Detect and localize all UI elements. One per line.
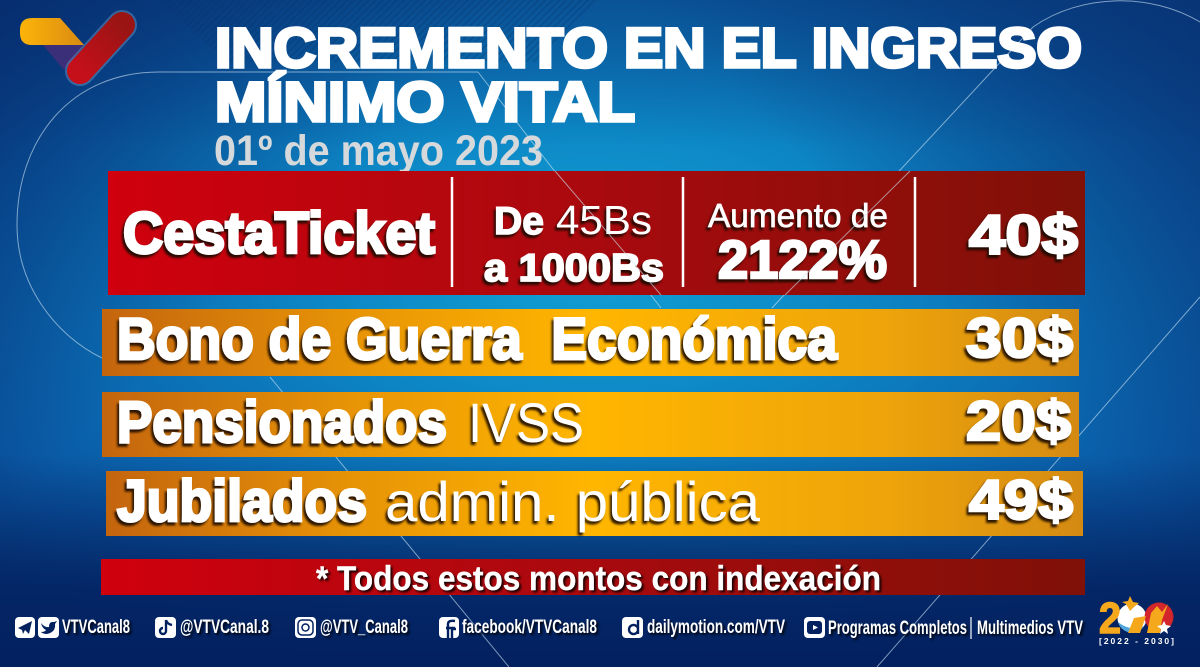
handle: dailymotion: dailymotion.com/VTV — [647, 617, 785, 638]
range from 45Bs to 1000Bs: a 1000Bs — [484, 247, 664, 290]
handle: VTVCanal8: VTVCanal8 — [62, 617, 130, 638]
logo: VTV check mark — [20, 18, 122, 71]
increase 2122% — [708, 197, 888, 290]
panel: Jubilados admin. pública: admin. pública — [385, 470, 761, 533]
panel: Pensionados IVSS: 20$ — [966, 389, 1071, 452]
icon: youtube — [804, 617, 825, 638]
logo: 200 years badge: 2 — [1099, 594, 1121, 643]
panel: Jubilados admin. pública — [106, 468, 1083, 536]
panel: Bono de Guerra Económica: Bono de Guerra Económica — [117, 307, 838, 372]
range from 45Bs to 1000Bs: 45Bs — [556, 197, 652, 243]
handle: tiktok: @VTVCanal.8 — [180, 617, 269, 638]
footnote bar — [101, 559, 1085, 598]
footer: social media row — [15, 617, 1083, 639]
logo: 200 years badge — [1099, 594, 1174, 646]
handle: instagram: @VTV_Canal8 — [320, 617, 408, 638]
date subtitle: 01º de mayo 2023 — [214, 127, 543, 175]
amount 40$: 40$ — [969, 203, 1078, 266]
panel: Pensionados IVSS — [102, 389, 1079, 457]
panel: Jubilados admin. pública: 49$ — [969, 468, 1073, 531]
panel: Jubilados admin. pública: Jubilados — [117, 469, 367, 534]
increase 2122%: Aumento de — [708, 197, 888, 234]
range from 45Bs to 1000Bs: De — [494, 200, 544, 243]
range from 45Bs to 1000Bs — [484, 197, 664, 290]
increase 2122%: 2122% — [718, 230, 887, 290]
footnote bar: * Todos estos montos con indexación — [316, 560, 881, 598]
panel: Pensionados IVSS: IVSS — [468, 391, 584, 454]
panel: Bono de Guerra Económica: 30$ — [966, 306, 1073, 369]
panel: Pensionados IVSS: Pensionados — [117, 390, 447, 455]
handle: facebook: facebook/VTVCanal8 — [462, 617, 597, 638]
overlay lines on red panel — [555, 171, 910, 295]
text: Multimedios VTV: Multimedios VTV — [977, 618, 1083, 639]
icon: tiktok — [155, 617, 176, 638]
divider lines — [452, 177, 915, 287]
title — [215, 16, 1082, 133]
icon: instagram — [295, 617, 316, 638]
title: INCREMENTO EN EL INGRESO — [215, 16, 1082, 79]
icon: twitter — [38, 617, 59, 638]
title: MÍNIMO VITAL — [215, 70, 635, 133]
text: Programas Completos: Programas Completos — [828, 618, 967, 639]
background hatch stripes — [160, 0, 600, 62]
icon: telegram — [15, 617, 35, 638]
CestaTicket label: CestaTicket — [123, 201, 435, 266]
icon: facebook — [439, 617, 459, 638]
icon: dailymotion — [622, 617, 643, 638]
panel: CestaTicket — [108, 171, 1085, 295]
logo: 200 years badge: [2022 - 2030] — [1099, 636, 1174, 646]
